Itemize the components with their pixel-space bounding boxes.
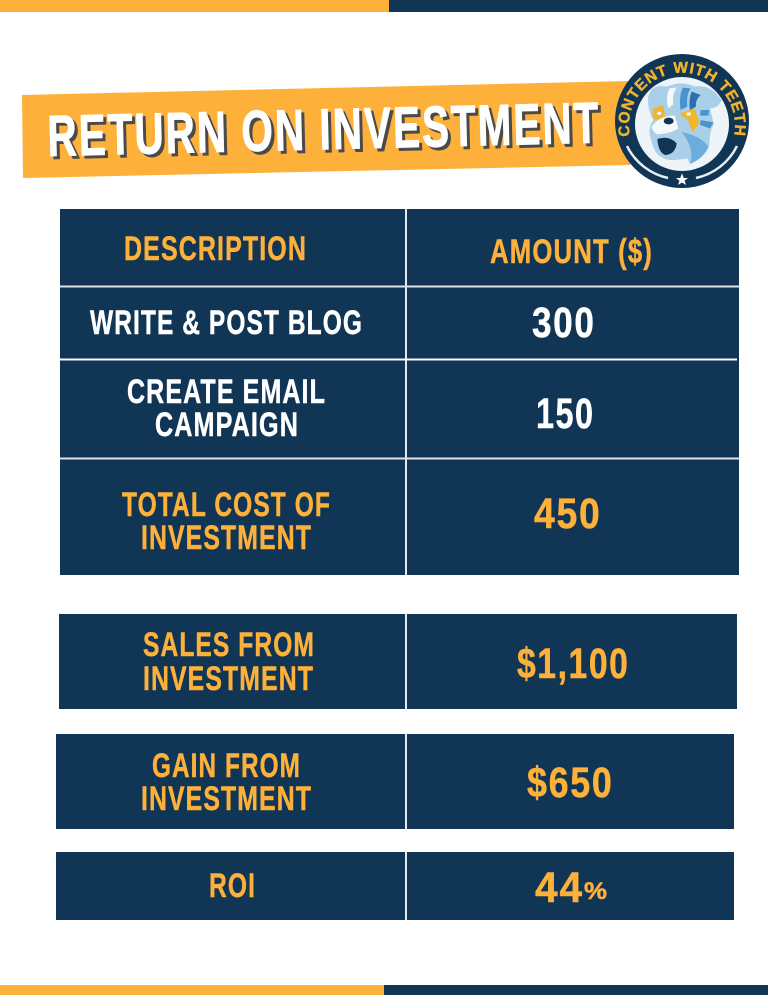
panel: cost table bbox=[60, 209, 739, 575]
panel: ROI: 44 bbox=[535, 864, 584, 912]
row label: create email campaign bbox=[127, 373, 326, 444]
bulldog mascot bbox=[648, 83, 722, 164]
value: 450: 450 bbox=[534, 490, 602, 538]
panel: sales from investment bbox=[59, 614, 737, 709]
row label: write and post blog: WRITE & POST BLOG bbox=[90, 304, 363, 342]
row label: create email campaign: CAMPAIGN bbox=[155, 406, 299, 444]
row label: total cost of investment: INVESTMENT bbox=[141, 519, 312, 557]
panel: gain from investment: GAIN FROM bbox=[152, 747, 301, 785]
top colour bar bbox=[0, 0, 768, 12]
panel: ROI: % bbox=[584, 878, 607, 905]
header: amount: AMOUNT ($) bbox=[490, 233, 653, 271]
panel: sales from investment: INVESTMENT bbox=[143, 660, 314, 698]
row label: total cost of investment: TOTAL COST OF bbox=[122, 486, 331, 524]
value: 150: 150 bbox=[536, 390, 594, 438]
panel: gain from investment: INVESTMENT bbox=[141, 780, 312, 818]
header: description: DESCRIPTION bbox=[124, 230, 307, 268]
title banner bbox=[22, 81, 630, 178]
panel: sales from investment: SALES FROM bbox=[143, 626, 315, 664]
panel: ROI bbox=[56, 852, 734, 920]
row label: total cost of investment bbox=[122, 486, 331, 557]
row label: create email campaign: CREATE EMAIL bbox=[127, 373, 326, 411]
panel: ROI: ROI bbox=[209, 867, 256, 905]
logo badge: CONTENT WITH TEETH bbox=[618, 62, 746, 136]
logo badge bbox=[615, 54, 749, 188]
panel: gain from investment bbox=[56, 734, 734, 829]
panel: gain from investment: $650 bbox=[527, 759, 614, 807]
bottom colour bar bbox=[0, 985, 768, 995]
value: 300: 300 bbox=[532, 299, 596, 347]
panel: sales from investment: $1,100 bbox=[517, 640, 630, 688]
